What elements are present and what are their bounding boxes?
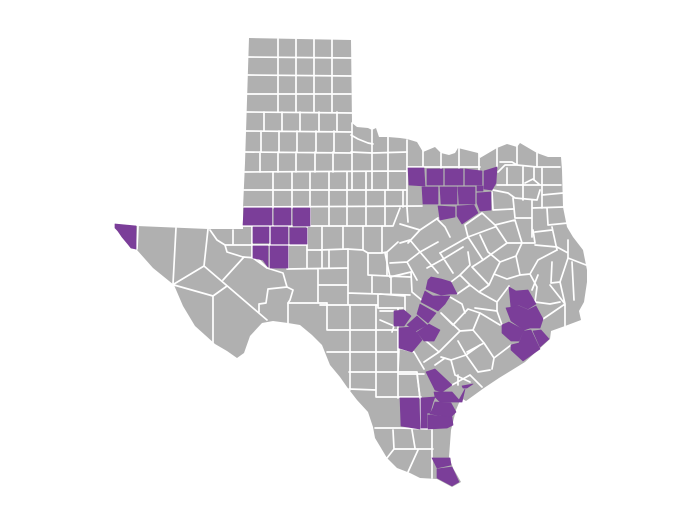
highlighted counties — [115, 167, 549, 486]
state silhouette — [115, 38, 587, 487]
southeast Texas highlighted counties — [502, 287, 549, 361]
west Texas highlighted counties — [115, 208, 310, 268]
north Texas highlighted counties — [408, 167, 497, 224]
county boundaries — [137, 39, 586, 478]
south Texas highlighted counties — [400, 369, 473, 486]
central Texas highlighted counties — [394, 277, 457, 352]
